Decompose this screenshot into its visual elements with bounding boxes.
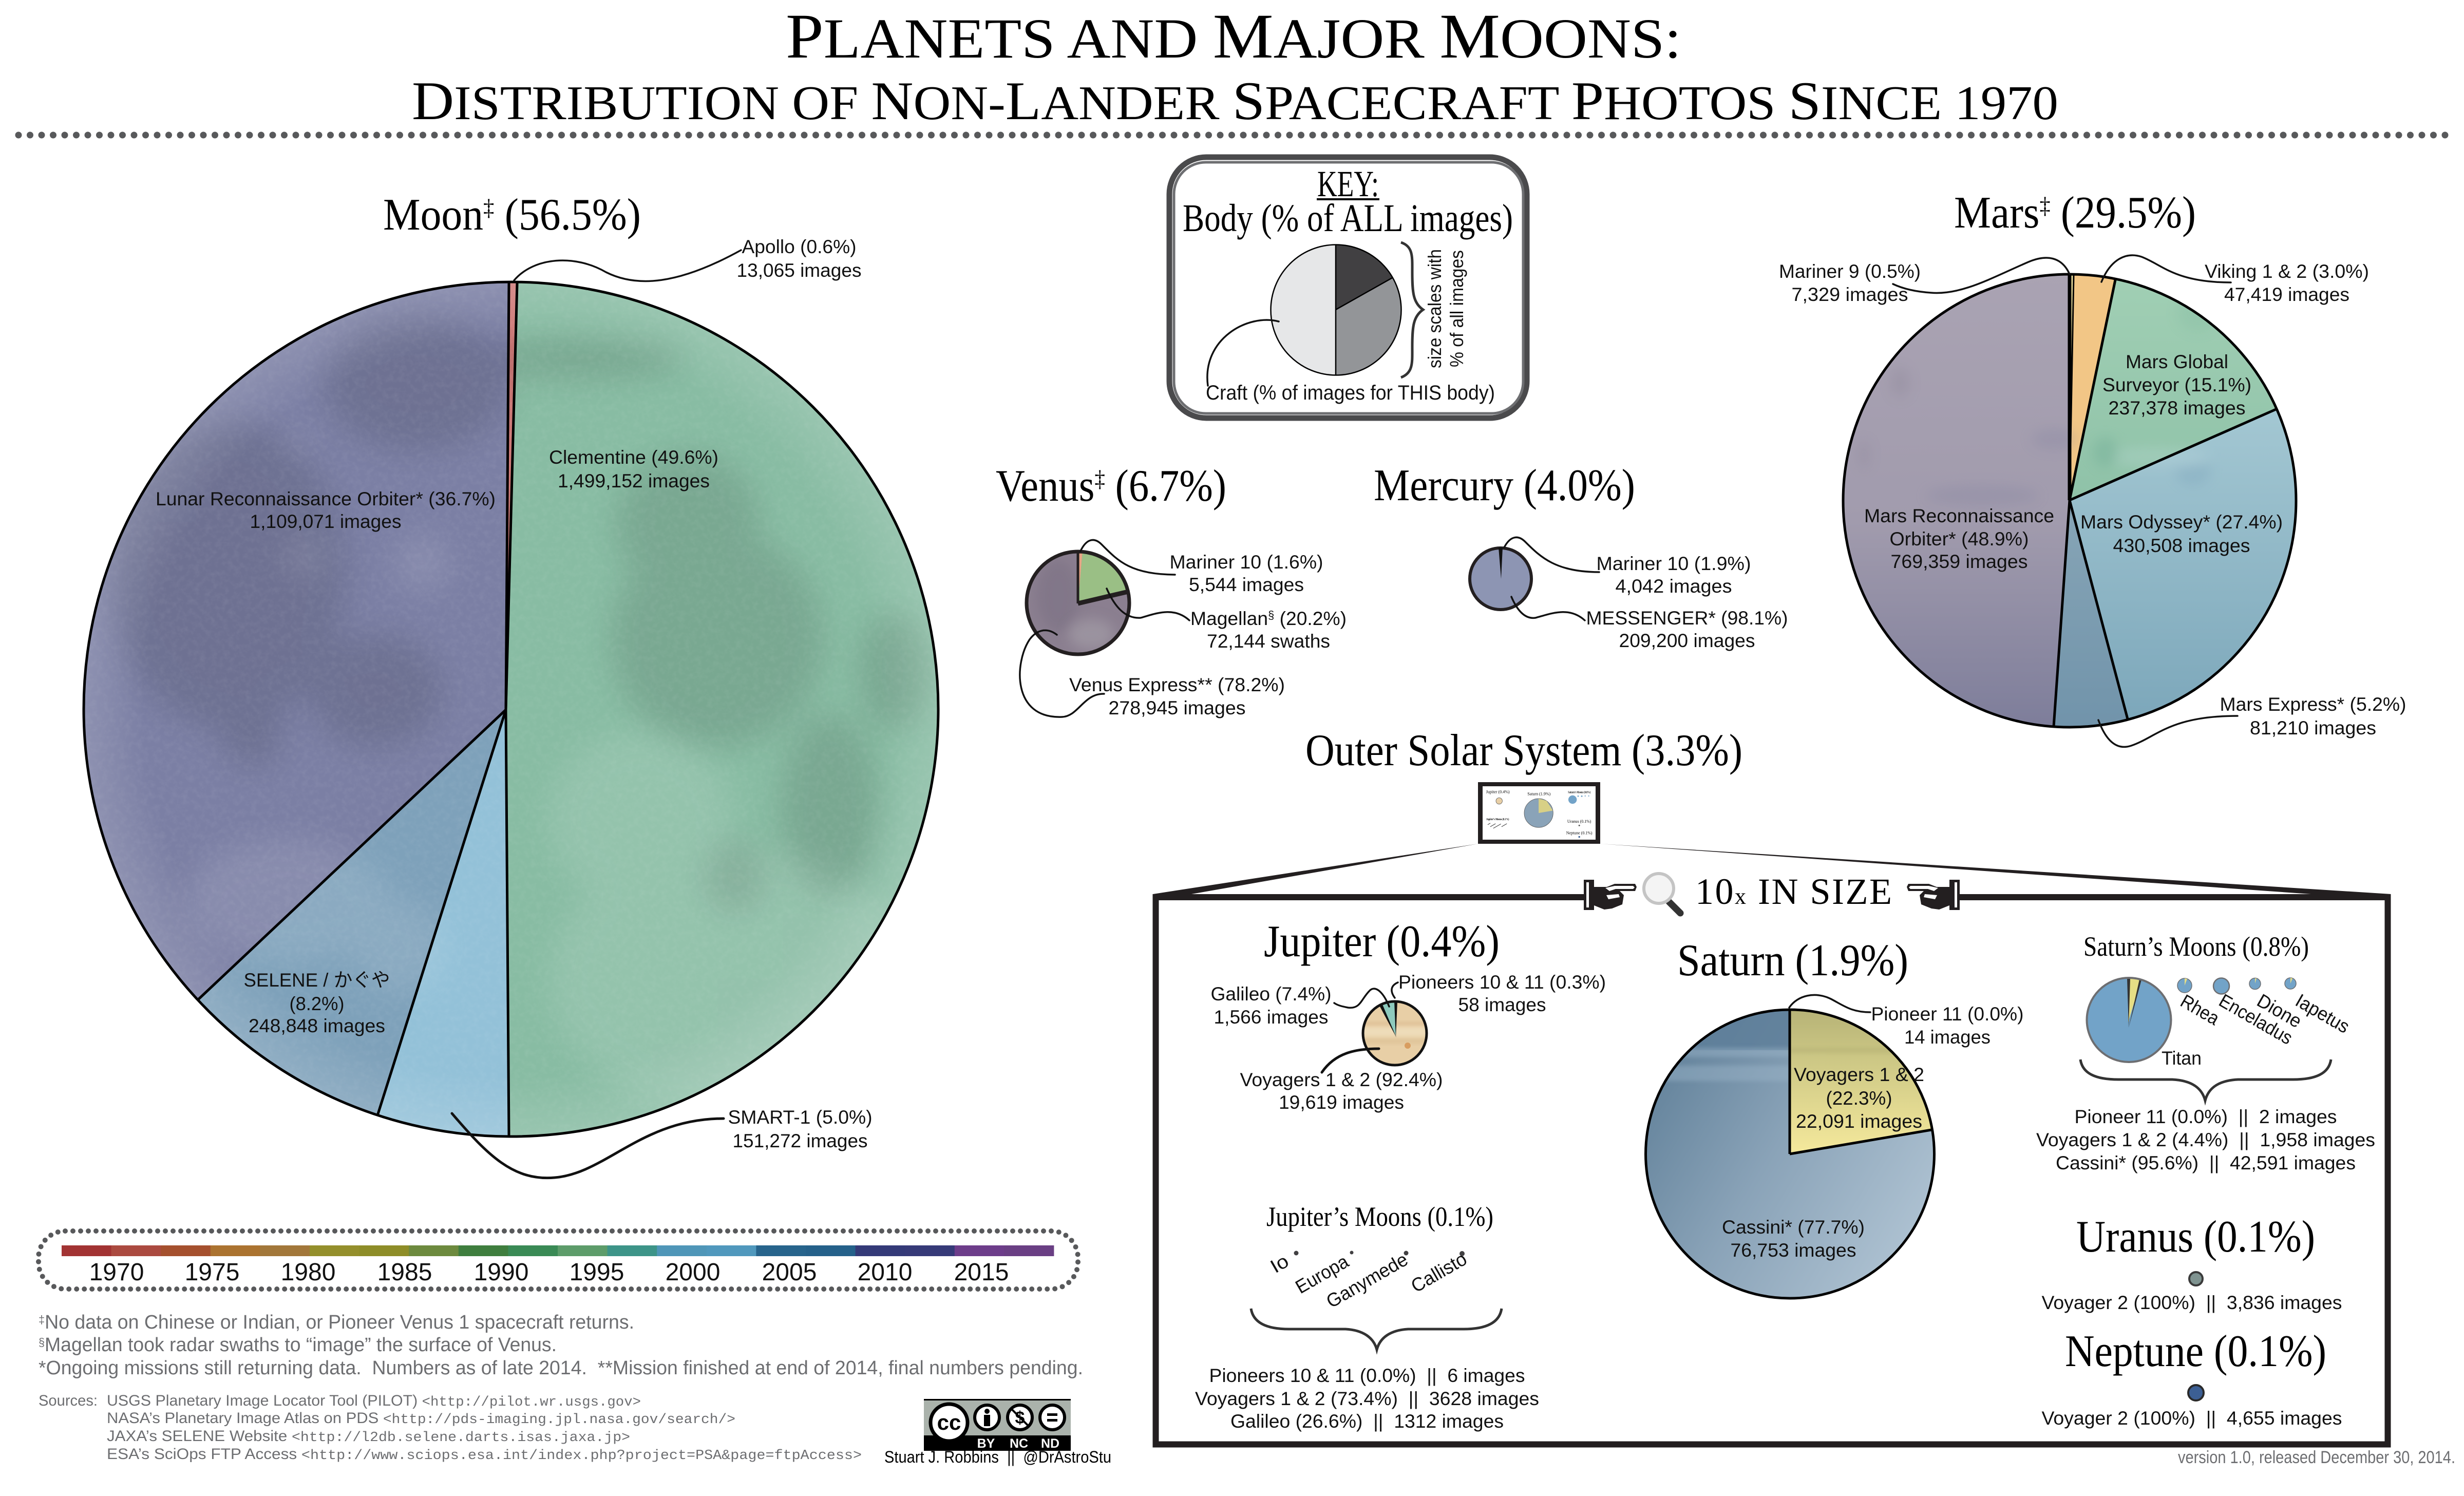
panel: Mercury <box>1374 461 1788 651</box>
label: Voyagers 1 & 2: 19,619 images <box>1279 1091 1404 1113</box>
year labels: 1970 <box>89 1259 144 1286</box>
year labels: 2015 <box>954 1259 1009 1286</box>
footnotes: § <box>39 1336 45 1349</box>
footnotes: ‡ <box>39 1313 45 1326</box>
sources: ESA’s SciOps FTP Access <http://www.sciops.esa.int/index.php?project=PSA&page=ftpAccess> <box>107 1446 862 1464</box>
label: Pioneers 10 & 11: Pioneers 10 & 11 (0.3%) <box>1398 971 1606 993</box>
label: Venus Express: 278,945 images <box>1108 697 1246 718</box>
heading: Moon: (56.5%) <box>494 190 641 240</box>
moons: small pies <box>2177 978 2296 994</box>
label: Voyagers 1 & 2: Voyagers 1 & 2 (92.4%) <box>1240 1069 1443 1090</box>
heading: Mercury: Mercury (4.0%) <box>1374 461 1635 510</box>
label: size note <box>1424 249 1467 368</box>
colour scale <box>62 1245 1054 1256</box>
heading: Mars: (29.5%) <box>2051 188 2196 238</box>
label: Magellan: 72,144 swaths <box>1207 630 1330 652</box>
label: Mariner 10: Mariner 10 (1.6%) <box>1170 551 1323 573</box>
label: Mariner 10: Mariner 10 (1.9%) <box>1596 553 1751 574</box>
label: Cassini <box>1722 1216 1865 1261</box>
text: Saturn moons spacecraft: Voyagers 1 & 2 (4.4%) || 1,958 images <box>2036 1129 2375 1150</box>
heading: Jupiter's moons: Jupiter’s Moons (0.1%) <box>1266 1201 1493 1232</box>
footnotes: *Ongoing missions still returning data. Numbers as of late 2014. **Mission finished at end of 2014, final numbers pending. <box>39 1357 1083 1379</box>
arrow: MESSENGER leader <box>1511 597 1585 620</box>
panel: outer solar system enlargement <box>1155 871 2388 1444</box>
text: Jupiter moons spacecraft: Pioneers 10 & 11 (0.0%) || 6 images <box>1209 1365 1525 1386</box>
label: Pioneer 11: Pioneer 11 (0.0%) <box>1871 1003 2023 1025</box>
label: Mars Express: 81,210 images <box>2250 717 2376 738</box>
arrow: Pioneer 11 leader <box>1789 995 1870 1012</box>
year labels: 1995 <box>570 1259 624 1286</box>
label: Apollo <box>736 236 862 281</box>
icon: pointing hand right <box>1907 880 1960 910</box>
label: Mars Express: Mars Express* (5.2%) <box>2220 693 2406 715</box>
label: Mars Reconnaissance Orbiter: Mars Reconnaissance <box>1864 505 2054 526</box>
panel: Jupiter's moons <box>1195 1201 1539 1432</box>
labels: Galilean moon names: Ganymede <box>1323 1248 1411 1312</box>
year labels: 2010 <box>858 1259 912 1286</box>
credit: Stuart J. Robbins || @DrAstroStu <box>884 1448 1111 1466</box>
label: Pioneers 10 & 11 <box>1398 971 1606 1015</box>
pie: Jupiter <box>1361 991 1430 1068</box>
footnotes: No data on Chinese or Indian, or Pioneer Venus 1 spacecraft returns. <box>45 1312 634 1333</box>
label: Lunar Reconnaissance Orbiter: 1,109,071 images <box>250 510 402 532</box>
label: Viking: 47,419 images <box>2224 283 2349 305</box>
text: Jupiter moons spacecraft: Voyagers 1 & 2 (73.4%) || 3628 images <box>1195 1388 1539 1409</box>
label: MESSENGER: MESSENGER* (98.1%) <box>1586 607 1788 629</box>
label: Cassini: Cassini* (77.7%) <box>1722 1216 1865 1238</box>
label: Cassini: 76,753 images <box>1731 1239 1856 1261</box>
icon: Creative Commons badge: ND <box>1041 1436 1059 1451</box>
labels: Saturn moon names: Dione <box>2253 990 2305 1032</box>
year labels: 2000 <box>666 1259 720 1286</box>
panel: Neptune <box>2042 1327 2342 1429</box>
label: Magellan: (20.2%) <box>1274 608 1347 629</box>
label: Apollo: Apollo (0.6%) <box>742 236 857 257</box>
text: Saturn moons spacecraft <box>2036 1106 2375 1173</box>
label: Mariner 10 <box>1596 553 1751 597</box>
label: Viking <box>2205 260 2369 305</box>
label: Galileo <box>1211 983 1331 1028</box>
arrow: Mariner 10 leader <box>1081 540 1175 575</box>
text: Jupiter moons spacecraft: Galileo (26.6%) || 1312 images <box>1230 1410 1504 1432</box>
pie: Venus <box>1025 550 1131 656</box>
label: SELENE: 248,848 images <box>249 1015 385 1036</box>
heading: Neptune: Neptune (0.1%) <box>2065 1327 2326 1376</box>
label: Pioneer 11 <box>1871 1003 2023 1048</box>
title <box>412 1 2058 131</box>
label: Mariner 9 <box>1779 260 1921 305</box>
labels: Galilean moon names <box>1266 1248 1470 1312</box>
labels: Saturn moon names: Enceladus <box>2215 990 2296 1049</box>
panel: Moon <box>0 190 1027 1237</box>
label: Clementine: Clementine (49.6%) <box>549 446 718 468</box>
label: Mariner 9: 7,329 images <box>1791 283 1908 305</box>
text: Jupiter moons spacecraft <box>1195 1365 1539 1432</box>
label: Voyagers 1 & 2 <box>1240 1069 1443 1113</box>
label: Mars Odyssey: 430,508 images <box>2113 535 2250 556</box>
pie: Titan <box>2085 976 2172 1066</box>
pie: key example <box>1270 244 1402 376</box>
label: Voyager 2: Voyager 2 (100%) || 4,655 images <box>2042 1407 2342 1429</box>
heading: Moon: ‡ <box>483 194 494 220</box>
inset: miniature of outer solar system: Saturn (1.9%) <box>1527 791 1550 796</box>
heading: Venus: Venus <box>996 461 1106 511</box>
heading: Jupiter: Jupiter (0.4%) <box>1264 917 1500 967</box>
label: size note: size scales with <box>1424 249 1445 368</box>
title: PLANETS AND MAJOR MOONS: <box>786 1 1681 71</box>
labels: Saturn moon names <box>2162 990 2353 1069</box>
inset: miniature of outer solar system: Saturn’s Moons (0.8%) <box>1568 791 1590 794</box>
label: Magellan <box>1190 608 1347 652</box>
labels: Saturn moon names: Iapetus <box>2292 990 2353 1037</box>
heading: Mars: Mars <box>1954 188 2047 238</box>
label: Mars Global Surveyor: Surveyor (15.1%) <box>2102 374 2251 395</box>
arrow: Magellan leader <box>1107 589 1189 620</box>
label: Mars Reconnaissance Orbiter: Orbiter* (48.9%) <box>1890 528 2029 550</box>
label: Voyagers 1 & 2: Voyagers 1 & 2 <box>1794 1064 1924 1085</box>
moons: Galilean dots <box>1294 1251 1465 1256</box>
heading: Saturn's moons: Saturn’s Moons (0.8%) <box>2083 931 2309 962</box>
label: Mars Reconnaissance Orbiter <box>1864 505 2054 572</box>
arrow: Mars Express leader <box>2098 716 2238 747</box>
label: Mariner 10: 5,544 images <box>1189 574 1304 595</box>
label: Lunar Reconnaissance Orbiter <box>156 488 496 532</box>
inset: miniature of outer solar system <box>1478 782 1600 844</box>
sources <box>39 1392 862 1464</box>
sources: NASA’s Planetary Image Atlas on PDS <http://pds-imaging.jpl.nasa.gov/search/> <box>107 1410 735 1428</box>
inset: miniature of outer solar system: Neptune (0.1%) <box>1566 830 1593 835</box>
arrow: Mariner 10 leader <box>1504 537 1599 572</box>
label: Venus Express: Venus Express** (78.2%) <box>1069 674 1285 695</box>
arrow: Galileo leader <box>1334 989 1389 1008</box>
label: Viking: Viking 1 & 2 (3.0%) <box>2205 260 2369 282</box>
label: SMART-1: SMART-1 (5.0%) <box>728 1106 872 1128</box>
inset: miniature of outer solar system: Uranus (0.1%) <box>1567 819 1591 824</box>
label: Mars Odyssey <box>2080 511 2283 556</box>
year labels: 2005 <box>762 1259 817 1286</box>
pie: Mercury <box>1470 547 1531 610</box>
text: Saturn moons spacecraft: Pioneer 11 (0.0%) || 2 images <box>2075 1106 2337 1127</box>
icon: Saturn moons brace <box>2080 1059 2331 1101</box>
labels: Galilean moon names: Io <box>1266 1250 1292 1277</box>
pie: Saturn <box>1638 976 2003 1310</box>
label: Clementine <box>549 446 718 491</box>
label: MESSENGER <box>1586 607 1788 651</box>
label: Magellan: § <box>1268 609 1274 621</box>
sources: USGS Planetary Image Locator Tool (PILOT) <http://pilot.wr.usgs.gov> <box>107 1392 641 1410</box>
label: SELENE: (8.2%) <box>290 993 344 1014</box>
labels: Saturn moon names: Titan <box>2162 1048 2202 1069</box>
year labels <box>89 1259 1009 1286</box>
arrow: zoom connector right <box>1600 844 2391 894</box>
arrow: Apollo leader <box>514 250 741 281</box>
label: craft: Craft (% of images for THIS body) <box>1206 382 1495 404</box>
pie: Mars <box>1842 273 2298 728</box>
label: SELENE: SELENE / かぐや <box>243 969 390 991</box>
year labels: 1985 <box>377 1259 432 1286</box>
label: Mariner 10: 4,042 images <box>1616 575 1732 597</box>
label: Mars Reconnaissance Orbiter: 769,359 images <box>1891 551 2027 572</box>
inset: miniature of outer solar system: Jupiter’s Moons (0.1%) <box>1486 818 1509 821</box>
panel: Mars <box>1779 188 2406 840</box>
heading: Saturn: Saturn (1.9%) <box>1677 936 1908 986</box>
label: Mars Global Surveyor <box>2102 351 2251 419</box>
arrow: SMART-1 leader <box>452 1113 724 1178</box>
heading: Venus: (6.7%) <box>1105 461 1226 511</box>
label: Pioneers 10 & 11: 58 images <box>1458 994 1546 1015</box>
year labels: 1990 <box>474 1259 528 1286</box>
label: Magellan: Magellan <box>1190 608 1268 629</box>
label: MESSENGER: 209,200 images <box>1619 630 1755 651</box>
sources: JAXA’s SELENE Website <http://l2db.selene.darts.isas.jaxa.jp> <box>107 1428 630 1446</box>
icon: pointing hand left <box>1584 880 1637 910</box>
heading: Outer Solar System: Outer Solar System (3.3%) <box>1305 726 1742 775</box>
heading: Moon: Moon <box>383 190 491 240</box>
icon: Creative Commons badge: NC <box>1010 1436 1028 1451</box>
inset: miniature of outer solar system: Jupiter (0.4%) <box>1486 789 1510 794</box>
heading: 10x in size: 10x IN SIZE <box>1695 871 1892 912</box>
pie: Neptune <box>2188 1385 2204 1400</box>
label: Voyagers 1 & 2: (22.3%) <box>1826 1087 1892 1109</box>
panel: Jupiter <box>1211 917 1606 1113</box>
label: SELENE <box>243 969 390 1036</box>
panel: key <box>1169 157 1527 418</box>
label: Voyager 2: Voyager 2 (100%) || 3,836 images <box>2042 1292 2342 1313</box>
year labels: 1980 <box>281 1259 335 1286</box>
label: Mars Global Surveyor: 237,378 images <box>2109 397 2245 419</box>
icon: size brace <box>1401 242 1423 377</box>
labels: Galilean moon names: Callisto <box>1407 1248 1470 1297</box>
pie: Moon <box>82 280 940 1138</box>
labels: Galilean moon names: Europa <box>1292 1251 1352 1298</box>
label: SMART-1 <box>728 1106 872 1151</box>
year labels: 1975 <box>185 1259 239 1286</box>
label: Voyagers 1 & 2: 22,091 images <box>1796 1110 1922 1132</box>
arrow: Venus Express leader <box>1020 630 1104 717</box>
label: Mars Odyssey: Mars Odyssey* (27.4%) <box>2080 511 2283 533</box>
arrow: Voyagers leader <box>1322 1049 1379 1072</box>
label: Venus Express <box>1069 674 1285 718</box>
sources: Sources: <box>39 1392 98 1409</box>
heading: Mars: ‡ <box>2039 192 2051 218</box>
panel: Saturn <box>1638 936 2023 1310</box>
heading: key: KEY: <box>1317 163 1379 204</box>
label: Mars Express <box>2220 693 2406 738</box>
heading: body: Body (% of ALL images) <box>1183 197 1513 240</box>
panel: Uranus <box>2042 1212 2342 1313</box>
arrow: Viking leader <box>2101 255 2231 282</box>
label: Mariner 10 <box>1170 551 1323 595</box>
heading: Venus: ‡ <box>1094 465 1105 491</box>
arrow: Pioneers leader <box>1392 982 1398 998</box>
label: Lunar Reconnaissance Orbiter: Lunar Reconnaissance Orbiter* (36.7%) <box>156 488 496 509</box>
panel: Venus <box>996 461 1347 718</box>
label: Voyagers 1 & 2 <box>1794 1064 1924 1132</box>
footnotes <box>39 1312 1083 1379</box>
label: size note: % of all images <box>1446 250 1467 367</box>
icon: Creative Commons badge: cc <box>937 1410 961 1434</box>
icon: Creative Commons badge <box>924 1399 1071 1451</box>
label: Mars Global Surveyor: Mars Global <box>2126 351 2228 372</box>
labels: Saturn moon names: Rhea <box>2177 990 2223 1029</box>
icon: Jupiter moons brace <box>1251 1309 1502 1350</box>
label: Galileo: Galileo (7.4%) <box>1211 983 1331 1005</box>
pie: Uranus <box>2189 1272 2203 1285</box>
legend: year colour bar <box>39 1231 1078 1289</box>
label: Pioneer 11: 14 images <box>1904 1026 1991 1048</box>
label: Galileo: 1,566 images <box>1214 1006 1328 1028</box>
label: Clementine: 1,499,152 images <box>558 470 710 491</box>
arrow: craft leader <box>1207 320 1279 386</box>
label: Mariner 9: Mariner 9 (0.5%) <box>1779 260 1921 282</box>
icon: magnifying glass <box>1644 874 1680 913</box>
arrow: Mariner 9 leader <box>1893 258 2070 293</box>
text: Saturn moons spacecraft: Cassini* (95.6%) || 42,591 images <box>2056 1152 2356 1173</box>
heading: Uranus: Uranus (0.1%) <box>2076 1212 2315 1262</box>
label: Apollo: 13,065 images <box>736 259 862 281</box>
arrow: zoom connector left <box>1153 844 1478 894</box>
icon: Creative Commons badge: BY <box>977 1436 995 1451</box>
icon: Creative Commons badge: $ <box>1015 1408 1025 1428</box>
footnotes: Magellan took radar swaths to “image” the surface of Venus. <box>45 1334 557 1356</box>
panel: Saturn's moons <box>2036 931 2375 1173</box>
label: SMART-1: 151,272 images <box>732 1130 868 1151</box>
title: DISTRIBUTION OF NON-LANDER SPACECRAFT PHOTOS SINCE 1970 <box>412 71 2058 131</box>
